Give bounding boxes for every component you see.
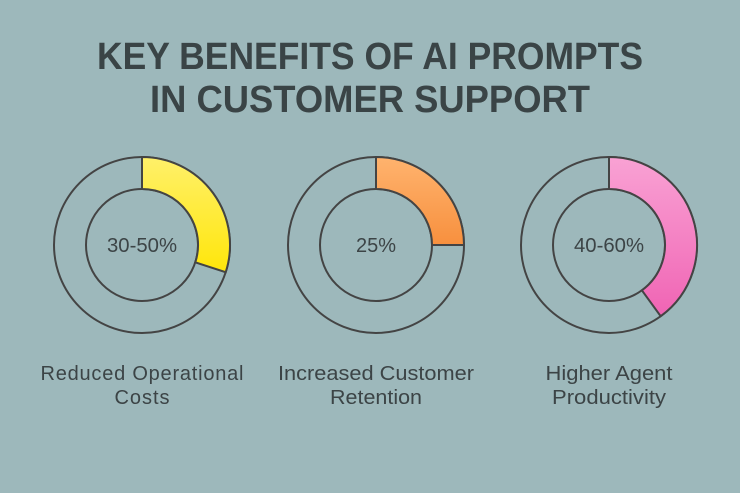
label: higher agent productivity: Productivity [552, 387, 666, 409]
donut: increased customer retention [288, 157, 464, 333]
title: KEY BENEFITS OF AI PROMPTS [97, 36, 643, 78]
donut: reduced operational costs: 30-50% [107, 235, 177, 257]
label: reduced operational costs [40, 363, 244, 409]
label: increased customer retention [278, 363, 474, 409]
label: increased customer retention: Increased Customer [278, 363, 474, 385]
title [97, 36, 643, 121]
label: increased customer retention: Retention [330, 387, 422, 409]
donut: higher agent productivity: 40-60% [574, 235, 644, 257]
donut: increased customer retention: 25% [356, 235, 396, 257]
label: higher agent productivity: Higher Agent [546, 363, 673, 385]
donut: higher agent productivity [521, 157, 697, 333]
title: IN CUSTOMER SUPPORT [150, 79, 590, 121]
donut: reduced operational costs [54, 157, 230, 333]
label: reduced operational costs: Costs [114, 387, 170, 409]
label: higher agent productivity [546, 363, 673, 409]
label: reduced operational costs: Reduced Operational [40, 363, 244, 385]
